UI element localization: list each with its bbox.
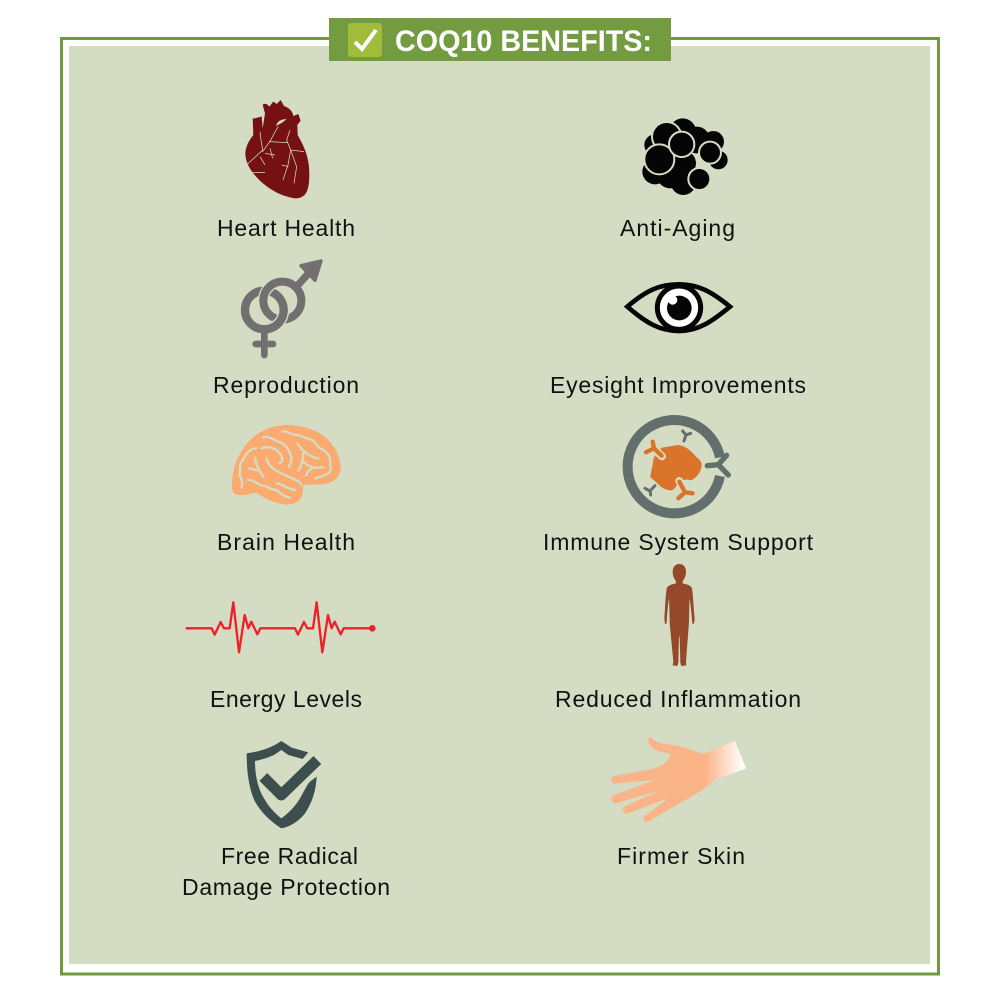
label: free radical damage protection [182,843,390,900]
icon: human body [664,564,695,666]
icon: shield with check [247,741,317,828]
title text: COQ10 BENEFITS: [395,25,652,58]
label: eyesight improvements: Eyesight Improvements [550,372,806,398]
icon: heartbeat line [186,602,376,652]
label: reduced inflammation: Reduced Inflammation [555,686,801,712]
icon: immune system [628,420,728,513]
label: anti-aging: Anti-Aging [620,215,735,241]
label: brain health: Brain Health [217,529,355,555]
label: free radical damage protection: Damage Protection [182,874,390,900]
label: reproduction: Reproduction [213,372,359,398]
icon: anti-aging cells [642,118,728,195]
label: energy levels: Energy Levels [210,686,362,712]
label: immune system support: Immune System Support [543,529,814,555]
label: firmer skin: Firmer Skin [617,843,745,869]
icon: brain [232,425,341,505]
icon: heart [245,100,309,198]
icon: hand [611,738,746,822]
icon: eye [627,284,730,331]
icon: check box [348,23,382,57]
icon: gender symbols [245,261,321,355]
label: free radical damage protection: Free Radical [221,843,358,869]
title banner [329,18,671,61]
label: heart health: Heart Health [217,215,355,241]
